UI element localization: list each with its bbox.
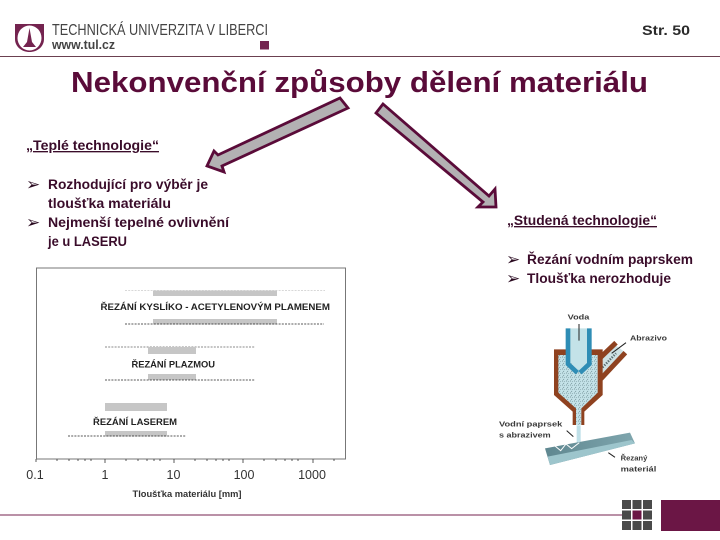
axis labels: 1000 [298,468,326,482]
abrasive inlet pipe [600,343,627,382]
chart: material thickness by cutting method [26,268,346,500]
footer maroon block [661,500,720,531]
university name: TECHNICKÁ UNIVERZITA V LIBERCI [52,20,268,39]
axis labels [26,468,326,482]
laser range [68,403,186,436]
page number: Str. 50 [642,22,690,38]
water tube [568,328,589,373]
laser range: ŘEZÁNÍ LASEREM [93,416,177,427]
bullet list: warm technologies: ➢ [26,213,40,233]
axis title: Tloušťka materiálu [mm] [132,489,242,500]
plasma range: ŘEZÁNÍ PLAZMOU [132,358,215,370]
bullet list: cold technology: Tloušťka nerozhoduje [527,271,671,286]
bullet list: warm technologies: Rozhodující pro výběr je [48,177,208,192]
bullet list: warm technologies: tloušťka materiálu [48,196,171,211]
bullet list: cold technology: Řezání vodním paprskem [527,252,693,267]
bullet list: cold technology [506,250,693,289]
diagram pointers [567,324,626,457]
bullet list: warm technologies: ➢ [26,175,40,195]
arrow: to cold technology [376,104,496,207]
mixing chamber [558,355,598,425]
axis labels: 100 [234,468,254,482]
bullet list: warm technologies: je u LASERU [47,234,127,249]
bullet list: warm technologies [26,175,230,249]
diagram labels: s abrazivem [499,430,551,439]
diagram labels: Abrazivo [630,334,668,343]
workpiece [545,433,635,465]
footer grid icon [622,500,652,530]
icon: university shield [15,24,44,52]
axis ticks [36,459,334,463]
diagram labels: Vodní paprsek [499,420,564,429]
oxy-acetylene range: ŘEZÁNÍ KYSLÍKO - ACETYLENOVÝM PLAMENEM [100,301,330,312]
axis labels: 1 [102,468,109,482]
text block: cold technology [506,213,693,289]
heading: cold technology: „Studená technologie“ [507,213,657,228]
diagram labels [499,313,668,473]
water jet [577,425,581,443]
diagram labels: materiál [621,464,656,473]
title: Nekonvenční způsoby dělení materiálu [71,67,648,99]
text block: warm technologies [26,138,230,249]
bullet list: cold technology: ➢ [506,250,520,270]
diagram: abrasive water-jet head [499,313,668,473]
footer: line and grid mark [0,500,720,531]
bullet list: warm technologies: Nejmenší tepelné ovlivnění [48,215,230,230]
nozzle housing [554,349,603,425]
axis labels: 10 [167,468,180,482]
plasma range [105,347,255,380]
arrow: to warm technologies [207,98,348,172]
axis labels: 0.1 [26,468,44,482]
logo square [260,41,269,50]
website: www.tul.cz [51,38,115,52]
header: university logo and name [15,20,269,52]
heading: warm technologies: „Teplé technologie“ [26,138,159,153]
diagram labels: Řezaný [621,454,648,463]
oxy-acetylene range [100,290,330,324]
bullet list: cold technology: ➢ [506,269,520,289]
diagram labels: Voda [568,313,590,322]
